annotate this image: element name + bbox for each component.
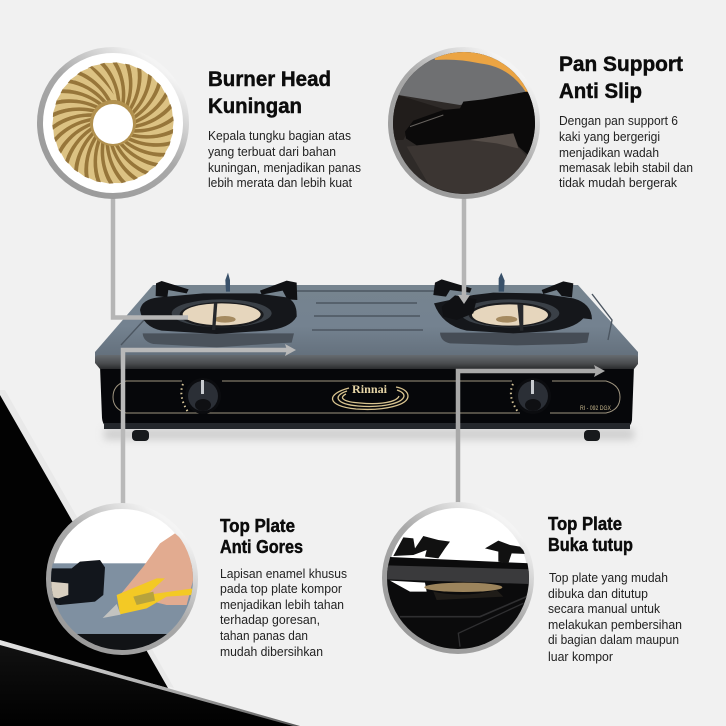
burner ring <box>140 293 297 334</box>
connector: top plate anti gores <box>123 344 296 505</box>
heading <box>559 53 683 103</box>
description: menjadikan lebih tahan <box>220 597 344 612</box>
burner head <box>472 304 548 326</box>
connector: top plate buka tutup <box>458 365 605 505</box>
support arms <box>156 281 189 297</box>
description: Top plate yang mudah <box>549 570 668 585</box>
description: terhadap goresan, <box>220 612 320 627</box>
stove product <box>40 47 693 664</box>
burner head <box>183 303 261 325</box>
description: tahan panas dan <box>220 628 308 643</box>
heading: Buka tutup <box>548 535 633 555</box>
description: pada top plate kompor <box>220 581 343 596</box>
stove front panel <box>100 366 634 429</box>
circle frame <box>385 505 531 651</box>
heading: Anti Slip <box>559 80 642 103</box>
panel: burner head <box>40 50 361 196</box>
plate front edge <box>95 355 638 369</box>
panel: top plate buka tutup <box>383 505 682 664</box>
description <box>208 128 361 190</box>
circle frame <box>49 506 195 652</box>
heading: Top Plate <box>220 516 295 536</box>
photo: pan support close-up <box>393 52 535 194</box>
description <box>559 113 693 190</box>
stove shadow <box>104 428 634 440</box>
heading: Top Plate <box>548 514 622 534</box>
description: luar kompor <box>548 649 614 664</box>
stove feet <box>132 430 600 441</box>
connector: pan support <box>458 197 470 304</box>
description: melakukan pembersihan <box>548 617 682 632</box>
heading <box>208 68 331 118</box>
support arms <box>433 279 472 297</box>
panel: pan support <box>387 47 693 200</box>
circle frame <box>391 50 537 196</box>
reflection <box>143 333 294 347</box>
description: mudah dibersihkan <box>220 644 323 659</box>
left burner <box>140 273 297 347</box>
connector: burner head <box>113 197 188 318</box>
description: secara manual untuk <box>548 601 660 616</box>
heading <box>548 514 633 555</box>
reflection <box>440 333 589 345</box>
description: tidak mudah bergerak <box>559 175 677 190</box>
heading: Burner Head <box>208 68 331 91</box>
description: kaki yang bergerigi <box>559 129 660 144</box>
description: yang terbuat dari bahan <box>208 144 336 159</box>
description: dibuka dan ditutup <box>548 586 648 601</box>
heading: Kuningan <box>208 95 302 118</box>
description: Lapisan enamel khusus <box>220 566 347 581</box>
description: memasak lebih stabil dan <box>559 160 693 175</box>
decorative black corner shape <box>0 390 300 726</box>
Rinnai logo: Rinnai <box>352 382 388 396</box>
photo: brass burner head <box>49 59 177 187</box>
plate grooves <box>121 291 612 345</box>
right knob <box>511 378 551 414</box>
description: Kepala tungku bagian atas <box>208 128 351 143</box>
description <box>548 570 682 664</box>
rear fin <box>499 273 505 292</box>
description: di bagian dalam maupun <box>548 632 679 647</box>
description: Dengan pan support 6 <box>559 113 678 128</box>
Rinnai logo <box>333 382 408 409</box>
panel: top plate anti gores <box>49 506 347 659</box>
description <box>220 566 347 659</box>
rear fin <box>225 273 230 292</box>
heading: Anti Gores <box>220 537 303 557</box>
gold control panel outline <box>113 381 620 413</box>
model label: RI - 092 DGX <box>580 406 611 412</box>
description: lebih merata dan lebih kuat <box>208 175 352 190</box>
right burner <box>433 273 592 345</box>
circle frame <box>40 50 186 196</box>
description: kuningan, menjadikan panas <box>208 160 361 175</box>
photo: cutter on top plate <box>50 533 197 657</box>
photo: opened top plate <box>383 536 530 650</box>
heading <box>220 516 303 557</box>
heading: Pan Support <box>559 53 683 76</box>
left knob <box>181 378 221 414</box>
stove top plate <box>95 285 638 360</box>
description: menjadikan wadah <box>559 145 659 160</box>
burner ring <box>434 293 592 333</box>
